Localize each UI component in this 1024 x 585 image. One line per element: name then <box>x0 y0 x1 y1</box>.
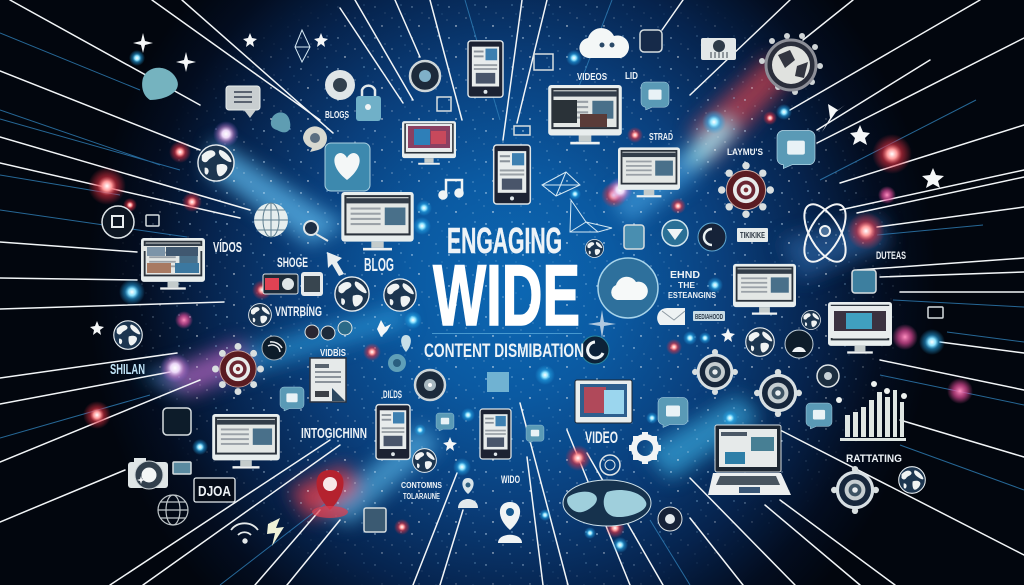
icon: heart and swirl circles <box>662 220 839 387</box>
scattered labels: SHOGE <box>277 254 308 270</box>
icon: tablets <box>376 41 530 459</box>
icon: lenses <box>102 61 682 531</box>
icon: arrow cursor <box>327 252 344 276</box>
light flares <box>83 50 973 553</box>
scattered labels: BLOG <box>364 255 394 275</box>
icon: music note <box>440 180 462 198</box>
scattered labels: VIDBIS <box>320 348 346 359</box>
scattered labels: DUTEAS <box>876 250 906 262</box>
scattered labels: INTOGICHINN <box>301 425 367 442</box>
icon: monitors <box>141 85 892 469</box>
icon: laptop <box>708 425 791 495</box>
icon: atom network <box>796 198 854 268</box>
title line: engaging: ENGAGING <box>447 220 562 261</box>
scattered labels: ESTEANGINS <box>668 291 717 300</box>
scattered labels: LID <box>625 71 638 82</box>
scattered labels: BEDIAHOOD <box>695 314 723 321</box>
icon: cloud circle <box>598 258 658 318</box>
scattered labels: VÍDOS <box>213 239 242 256</box>
title <box>424 220 584 362</box>
scattered labels: STRAD <box>649 132 673 143</box>
icon: top-right camera <box>701 38 736 60</box>
icon: gears <box>212 162 879 514</box>
scattered labels: CONTOMNS <box>401 481 443 490</box>
scattered labels <box>110 71 906 502</box>
scattered labels: SHILAN <box>110 361 145 378</box>
scattered labels: VIDEOS <box>577 72 607 83</box>
icon: heart badge <box>325 143 370 191</box>
icon: teal chat blobs <box>142 68 327 152</box>
scattered labels: TOLARAUNE <box>403 492 440 501</box>
icon: world map <box>563 480 651 526</box>
icons <box>90 28 944 546</box>
icon: location pins <box>312 335 522 543</box>
scattered labels: DJOA <box>198 483 231 500</box>
scattered labels: VNTRBING <box>275 303 322 319</box>
icon: wifi and bolt <box>231 518 284 546</box>
scattered labels: BLOGS <box>325 110 349 121</box>
scattered labels: LAYMU'S <box>727 147 763 157</box>
scattered labels: RATTATING <box>846 453 902 465</box>
scattered labels: WIDO <box>501 474 520 486</box>
icon: document <box>310 358 346 402</box>
icon: app tiles <box>263 272 323 296</box>
icon: wire globe <box>158 495 188 525</box>
divider under title <box>432 333 582 334</box>
subtitle: CONTENT DISMIBATION <box>424 340 584 362</box>
icon: framed squares <box>146 30 943 532</box>
scattered labels: THE <box>678 281 696 290</box>
title line: wide: WIDE <box>433 248 580 344</box>
icon: padlock <box>356 86 381 121</box>
starfield <box>116 4 904 585</box>
bar chart <box>836 381 907 441</box>
icon: colourful monitor screens <box>141 100 890 338</box>
scattered labels: TIKIKIKE <box>740 231 765 240</box>
icon: globe gear top right <box>759 33 823 95</box>
scattered labels: EHND <box>670 270 700 281</box>
icon: stars <box>90 33 944 484</box>
scattered labels: VIDEO <box>585 428 618 447</box>
icon: network polygons <box>295 30 612 232</box>
icon: wifi circles <box>262 321 813 364</box>
icon: globes <box>114 145 925 493</box>
icon: white cog <box>629 432 661 464</box>
scattered labels: DILDS <box>383 389 402 401</box>
icon: camera <box>128 458 168 489</box>
icon: message badges <box>226 82 832 443</box>
icon: envelope <box>657 308 685 325</box>
icon: cloud top <box>579 28 629 58</box>
icon: white wire globe <box>254 203 288 237</box>
icon: magnifier <box>304 221 328 241</box>
glow streaks <box>140 55 890 525</box>
icon: video frame <box>575 380 632 423</box>
